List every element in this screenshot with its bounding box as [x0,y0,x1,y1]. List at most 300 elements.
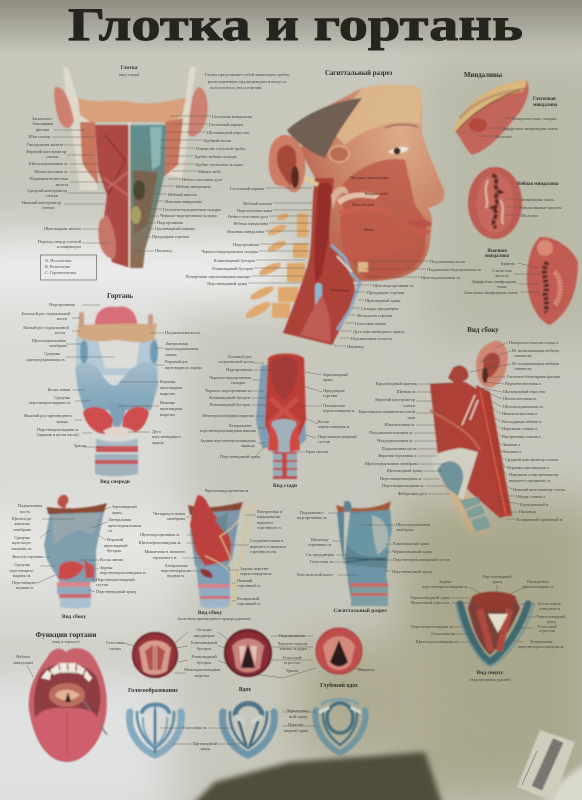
labels: side view left: Средняя [14,535,30,540]
labels: back view right: Преддверие [323,388,345,393]
labels: side view left: язычная [15,521,29,526]
illustration: larynx side [44,495,107,608]
labels: right side of pharynx: Трубно-глоточная складка [195,162,243,167]
label: palatine tonsil [13,654,33,677]
labels: lateral view left: Шилоязычная м. [384,422,415,427]
labels: top view: Перстневидный [482,574,512,579]
labels: right side of pharynx: Грушевидный карман [155,226,195,231]
labels: lateral view right: Шилоглоточная м. [503,396,537,401]
labels: left side of pharynx: Околоушная железа [27,142,63,147]
labels: pharyngeal tonsil: Диффузная лимфоидная ткань [502,126,558,131]
labels: side view right: бугорок [107,548,122,553]
caption: top view: Вид сверху [477,670,504,676]
labels: lateral view left: Крыловидный крючок [376,381,418,386]
labels: side view left [9,503,75,590]
labels: muscles right: Возвратный [237,596,260,601]
legend box [40,255,96,280]
labels: larynx front left: (прямая и косая части) [37,432,79,437]
labels: right side of pharynx: Надгортанник [157,220,184,225]
labels: upper circles: Голосовая [106,640,124,645]
labels: larynx front right: Верхний рог [165,359,188,364]
labels: muscles left: Латеральная [165,563,187,568]
heading: lateral view: Вид сбоку [467,326,499,334]
labels: muscles right: Внутренняя и [257,509,283,514]
panel: tonsils [454,72,578,325]
labels: upper circles: бугорок [197,646,212,651]
labels: left side of pharynx: фасция [36,127,49,132]
labels: muscles right: гортанного н. [257,525,282,530]
caption: top view: (надгортанник удален) [469,677,511,682]
labels: right side of pharynx: Небно-глоточная дуга [182,177,222,182]
labels: larynx front left: Надгортанник [49,302,76,307]
labels: upper circles: Рожковидный [191,654,217,659]
legend box: C. Гортаноглотка [45,270,76,275]
labels: left side of pharynx: Затылочно- [32,116,54,121]
labels: back view left: Межчерпаловидная вырезка [202,413,254,418]
title: Глотка и гортань [68,0,523,51]
labels: right side of pharynx [134,114,252,253]
labels: lateral view right: Глоточно-базилярная фасция [507,374,560,379]
labels: left of the sagittal section: Надглоточная ямка [237,208,272,213]
labels: inside the head: Твердое небо [364,191,388,196]
labels: left of the sagittal section: Рожковидный бугорок [212,266,254,271]
heading: inhalation: Вдох [239,687,251,693]
labels: larynx front left: Малый рог подъязычной [23,325,69,330]
labels: left of the sagittal section: Клиновидный бугорок [214,258,256,263]
labels: left side of pharynx: глотки [46,193,59,198]
labels: left side of pharynx: Переход между глоткой [38,239,82,244]
labels: side view left: мембрана [13,527,31,532]
labels: upper circles: танная складка [279,646,307,651]
panel: larynx back view [200,354,357,489]
labels: side view left: Выступ гортани [12,554,42,559]
labels: section left: Св. преддверия [306,552,334,557]
labels: lateral view left: Фиброзная дуга [398,491,427,496]
labels: left side of pharynx: глотки [42,205,55,210]
labels: lateral view right: Верхняя щитовидная а. [507,465,550,470]
illustration: cartilages phonation [130,704,181,755]
labels: larynx front left: Нижний рог щитовидного [24,413,72,418]
caption: mirror view: (вид в зеркале) [52,639,80,644]
labels: section right: Черпаловидный хрящ [392,549,433,554]
heading: functions of the larynx: Функции гортани [36,630,97,639]
labels: lateral view left: глотки [403,403,416,408]
labels: right side of pharynx: Глоточно-надгортанная складка [163,207,221,212]
illustration: head in sagittal section [269,85,444,345]
illustration: lateral dissection [430,341,512,532]
labels: muscles left: мембрана [167,516,185,521]
labels: left of the sagittal section: Глоточный карман [230,186,265,191]
labels: lingual tonsil: Язычная [487,249,507,254]
labels: upper circles: Надгортанник [279,633,306,638]
labels: right side of pharynx: Преддверие гортани [152,234,190,239]
illustration: palatine tonsil [468,167,522,239]
labels: right of the sagittal section: Щитонадгортанная св. [373,283,414,288]
caption: sagittal section: Сагиттальный разрез [333,607,387,614]
illustration: larynx from above [456,592,534,666]
labels: side view left: перстнещито- [9,568,35,573]
labels: right of the sagittal section: Подъязычная кость [430,259,465,264]
labels: upper circles: Складка [196,627,212,632]
panel: pharynx posterior view [22,65,290,280]
labels: side view right: щитовидный [104,543,128,548]
labels: right side of pharynx: Черпало-надгортанная складка [160,213,217,218]
labels: left side of pharynx: Шилоподъязычная м. [29,161,68,166]
labels: side view right: щитоподъязычная [108,523,141,528]
labels: section left: Щитонад- [311,537,330,542]
labels: left of the sagittal section: Небно-глоточная дуга [228,214,268,219]
labels: back view left: Клиновидный бугорок [209,395,252,400]
labels: muscles right [225,509,286,606]
text block: pharynx definition: Глотка представляет собой мышечную трубку, [205,72,290,78]
labels: larynx front left: мембрана [49,343,67,348]
labels: cartilages [160,708,316,751]
labels: section left: Подъязычно- [300,510,325,515]
labels: lateral view left: Подъязычная кость [382,446,417,451]
labels: side view right: св. [108,528,113,533]
labels: lingual tonsil: Крипты [501,261,515,266]
labels: pharyngeal tonsil: Оболочка [494,134,512,139]
labels: larynx front left: Косая линия [48,387,70,392]
labels: lingual tonsil: Диффузная лимфоидная [472,279,516,284]
labels: larynx front left: Средняя [44,351,60,356]
labels: cartilages: ный хрящ [289,714,308,719]
labels: inside the head [350,175,389,232]
labels: lateral view right: Шилоподъязычная св. [503,404,544,409]
labels: muscles right: гортанного нн. [250,549,277,554]
labels: back view left: Черпало-надгортанная [209,375,251,380]
labels: larynx front right: хряща [152,440,164,445]
labels: right side of pharynx: Пищевод [155,248,173,253]
labels: muscles left: Щиточерпаловидная м. [139,540,181,545]
labels: section left: Голосовая св. [310,559,334,564]
labels: back view right: гортани [323,393,338,398]
labels: lateral view left: Подъязычно-язычная м. [369,430,413,435]
labels: right side of pharynx: Трубный валик [203,138,232,143]
labels: lateral view right: Наружная и внутренняя вв. [509,472,559,477]
labels: left side of pharynx: Верхний констриктор [26,149,66,154]
labels: left side of pharynx [22,116,110,249]
labels: larynx front left: Большой рог подъязычной [22,311,71,316]
labels: back view left [200,354,272,459]
labels: top view: черпаловидная м. [522,584,554,589]
caption: side view without plate: Вид сбоку [198,609,222,616]
labels: right side of pharynx: Трубно-небная складка [194,154,237,159]
labels: lateral view right: Нижний констриктор глотки [513,487,566,492]
illustration: cartilages inhalation [223,704,274,755]
label: top of muscles view: Черпалонадгортанная м. [205,488,249,493]
labels: back view left: Черпало-надгортанная м. [205,388,251,393]
labels: lingual tonsil: миндалина [485,254,510,259]
labels: side view right: Верхний [107,537,124,542]
labels: top view: Голосовой [537,624,557,629]
labels: lateral view right: Наружная сонная а. [502,426,538,431]
labels: lateral view left: Перстнещитовидная м. [380,476,422,481]
labels: lateral view right: Поверхностная височная а. [509,340,559,345]
labels: upper circles: преддверия [193,633,215,638]
labels: top view: Голосовая м. [431,631,455,636]
labels: lateral view right: Возвратный гортанный н. [516,517,563,522]
labels: back view right: черпаловидная м. [323,408,355,413]
labels: top view: перстнечерпаловидная м. [422,584,468,589]
labels: larynx front left: щитоподъязычная св. [26,357,66,362]
labels: lateral view right: Язычная а. [502,449,522,454]
labels: right side of pharynx: Отверстие слуховой трубы [196,146,245,151]
labels: upper circles: Пищевод [358,667,375,672]
labels: upper circles: Черпало-надгор- [278,641,309,646]
labels: side view right: Перстнещитовидный [96,577,135,582]
labels: muscles right: гортанный н. [237,601,261,606]
labels: left of the sagittal section: Перстневидный хрящ [207,281,248,286]
labels: top view [410,574,566,649]
labels: lateral view left: Перстнещитовидная м. [382,483,424,488]
illustration: cervical vertebrae [244,212,308,321]
labels: lingual tonsil [464,249,540,295]
labels: cartilages: хрящ [200,746,210,751]
heading: pharynx: Глотка [121,65,138,71]
caption: top view [469,670,511,682]
labels: left of the sagittal section: Надгортанник [233,242,260,247]
labels: lateral view right: М. поднимающая небную [512,361,560,366]
caption: back view: Вид сзади [273,483,297,489]
labels: lateral view right: Блуждающий н. [520,502,549,507]
labels: side view left: видная м. [16,585,34,590]
labels: back view right: Поперечная [323,403,345,408]
labels: right of the sagittal section: Дуга перстневидного хряща [353,329,405,334]
labels: right side of pharynx: Небный язычок [168,192,198,197]
labels: upper circles: Клиновидный [191,640,218,645]
legend box: A. Носоглотка [45,258,71,263]
labels: left side of pharynx: железа [54,182,68,187]
labels: larynx front right: перстневидного [152,434,181,439]
labels: muscles right: черпаловидная м. [240,571,272,576]
labels: right of the sagittal section: Пищевод [347,344,365,349]
labels: lateral view left: Надподъязычная м. [377,438,413,443]
labels: muscles right: гортанный н. [237,583,261,588]
labels: back view left: Большой рог [228,354,252,359]
labels: top view: Поперечная [527,579,549,584]
labels: right side of pharynx: Мягкое небо [198,169,221,174]
labels: side view right: Зерновидный [112,504,137,509]
labels: right of the sagittal section: Преддверие гортани [367,290,405,295]
labels: section right: Перстневидный хрящ [392,569,432,574]
labels: muscles right: наружная вв. [257,514,281,519]
labels: larynx front right [118,330,202,445]
labels: side view left: язычная св. [12,546,32,551]
labels: top view: Задняя [439,579,451,584]
labels: top view: отросток [539,628,556,633]
legend box: B. Ротоглотка [45,264,70,269]
labels: muscles left: гортанного н. [153,555,177,560]
labels: back view right: сустав [318,439,330,444]
labels: lingual tonsil: ткань [497,284,507,289]
labels: lateral view left [359,381,450,496]
labels: inside the head: Носовая перегородка [350,175,389,180]
caption: side view: Вид сбоку [62,613,86,620]
labels: palatine tonsil: Лимфоидная ткань [519,197,554,202]
panel: larynx side view without thyroid plate [139,488,286,621]
labels: larynx front left: Щитоподъязычная [32,338,66,343]
labels: upper circles: бугорок [197,660,212,665]
labels: lateral view left: Щитоподъязычная мембрана [365,461,418,466]
labels: top view: хрящ [546,619,556,624]
labels: side view right: хрящ [112,510,122,515]
labels: inside the head: Язык [364,227,374,232]
labels: lateral view right: занавеску [514,353,533,358]
labels: side view left: видная св. [13,573,31,578]
labels: lateral view right: Верхнечелюстная а. [505,381,542,386]
caption: posterior view: (вид сзади) [119,72,140,77]
labels: palatine tonsil: Небная миндалина [517,182,559,187]
labels: cartilages: видный хрящ [284,728,309,733]
labels: right of the sagittal section: Подъязычно-надгортанная св. [427,267,482,272]
labels: larynx front left [22,302,115,448]
labels: back view right: Края трахеи [306,449,329,454]
text block: pharynx definition: полости носа, рта и гортани. [210,85,262,91]
labels: side view left: Подъязычная [18,503,42,508]
panel: larynx views by breath phase [106,627,375,755]
heading: deep inhalation: Глубокий вдох [320,682,358,689]
labels: muscles left: видная м. [167,573,185,578]
labels: side view left: Щитоподъ- [12,516,33,521]
labels: section right [360,522,450,574]
labels: left side of pharynx: Щитовидная железа [44,226,81,231]
labels: top view: ловидная м. [539,606,561,611]
labels: muscles left: перстнечерпало- [161,568,192,573]
labels: side view right: Перстневидный хрящ [96,589,136,594]
labels: lateral view right: Внутренняя сонная а. [502,434,542,439]
caption: side view without plate [178,609,251,621]
illustration: pharynx from behind [54,67,208,268]
labels: section right: Клиновидный хрящ [393,541,430,546]
labels: upper circles: вырезка [195,673,209,678]
labels: top view: Косая черпа- [538,601,562,606]
labels: muscles right: верхнего [257,520,273,525]
illustration: larynx front [75,306,158,476]
labels: upper circles: связка [109,646,121,651]
caption: side view without plate: (пластина щитовидного хряща удалена) [178,616,251,621]
labels: larynx front right: щитовидная [160,385,182,390]
illustration: cartilages deep inhalation [316,700,365,753]
labels: section left: Эластический конус [296,572,334,577]
illustration: open mouth [29,648,107,762]
labels: muscles right: Нижний [237,578,253,583]
labels: lingual tonsil: железы [494,273,509,278]
labels: right of the sagittal section: Голосовая связка [355,321,386,326]
labels: left side of pharynx: Шилоглоточная м. [34,169,68,174]
labels: muscles right: Задняя перстне- [240,566,270,571]
labels: side view left: щитоподъ- [12,540,32,545]
labels: top view: Латеральная [530,639,552,644]
labels: right of the sagittal section [331,259,482,349]
illustration: larynx muscles and nerves [188,495,258,608]
labels: larynx front left: кости [57,316,68,321]
labels: back view right: Зерновидный [323,372,348,377]
labels: larynx front left: Перстнещитовидная м. [37,427,79,432]
labels: muscles right: Соединительная в. [250,538,284,543]
labels: lateral view left: Верхняя гортанная а. [378,453,417,458]
labels: pharyngeal tonsil: миндалина [533,103,558,108]
labels: left side of pharynx: базилярная [32,121,53,126]
labels: lateral view right: верхнего гортанного н. [509,478,551,483]
labels: upper circles: Голосовой [282,655,302,660]
illustration: pharyngeal tonsil [454,80,529,155]
labels: section right: Щитоподъязычная [396,522,430,527]
labels: lateral view left: шов [408,415,415,420]
illustration: larynx back [256,354,306,479]
labels: right of the sagittal section: Щитовидный хрящ [365,298,401,303]
labels: lateral view left: Верхний констриктор [375,397,415,402]
panel: larynx side view [9,495,147,620]
labels: section right: мембрана [396,527,414,532]
labels: lateral view right: Восходящая небная а. [502,419,542,424]
labels: left of the sagittal section: Черпало-надгортанная складка [201,249,258,254]
labels: left side of pharynx: глотки [46,154,59,159]
labels: larynx front left: кости [55,330,66,335]
labels: side view left: кость [20,509,30,514]
labels: right of the sagittal section: Желудочек гортани [357,313,393,318]
caption: front view: Вид спереди [100,479,130,485]
illustration: lingual tonsil [527,237,578,325]
labels: top view: Черпаловидный [536,614,566,619]
labels: side view right [80,504,147,594]
labels: cartilages: Черпаловид- [286,708,310,713]
labels: lateral view right: М. натягивающая небную [512,348,560,353]
text block: pharynx definition: расположенную над пищеводом и входе от [208,79,286,84]
labels: larynx front right: связка [165,352,177,357]
labels: muscles left: Щитонадгортанная м. [140,532,180,537]
illustration: larynx in section [336,501,392,606]
labels: top view: Черпаловидный хрящ [410,595,451,600]
heading: larynx: Гортань [107,292,133,300]
labels: pharyngeal tonsil: Глоточная [533,97,556,102]
labels: larynx front right: щитовидная [160,406,182,411]
labels: pharyngeal tonsil [478,97,558,139]
labels: palatine tonsil [505,182,562,218]
labels: left of the sagittal section: Язычная миндалина [227,229,264,234]
labels: muscles left [139,511,205,578]
labels: cartilages: Перстне- [288,722,305,727]
labels: side view right: Латеральная [108,517,131,522]
labels: side view right: сустав [96,582,108,587]
labels: left side of pharynx: Поднижнечелюстная [30,176,68,181]
labels: section left: надгортанная св. [297,515,327,520]
labels: side view right: перстнечерпаловидная м. [100,570,147,575]
labels: back view left: мышца [241,443,255,448]
labels: larynx front right: Латеральная [165,341,188,346]
labels: side view left: Средняя [14,562,30,567]
labels: side view left: Перстнещито- [12,580,39,585]
labels: upper circles: отросток [284,660,301,665]
labels: lateral view right: Пищевод [519,509,537,514]
labels: larynx front right: щитоподъязычная [165,346,198,351]
labels: right side of pharynx: Глоточный карман [209,122,244,127]
labels: palatine tonsil: Оболочка [520,213,538,218]
labels: back view right [296,372,357,454]
labels: section right: Перстнечерпаловидный сустав [393,557,450,562]
labels: back view left: перстнечерпаловидная мышца [200,428,256,433]
labels: top view: перстнечерпаловидная м. [518,644,564,649]
labels: larynx front left: хряща [56,419,68,424]
labels: left side of pharynx: Шов глотки [28,134,51,139]
labels: back view right: черпаловидная м. [318,424,350,429]
text block: pharynx definition [205,72,290,91]
labels: larynx front right: Подъязычная кость [165,330,200,335]
labels: left of the sagittal section [186,186,312,286]
labels: back view left: Рожковидный бугорок [210,402,251,407]
labels: lateral view right: Лицевая а. [502,442,521,447]
labels: muscles left: Четырехугольная [153,511,185,516]
